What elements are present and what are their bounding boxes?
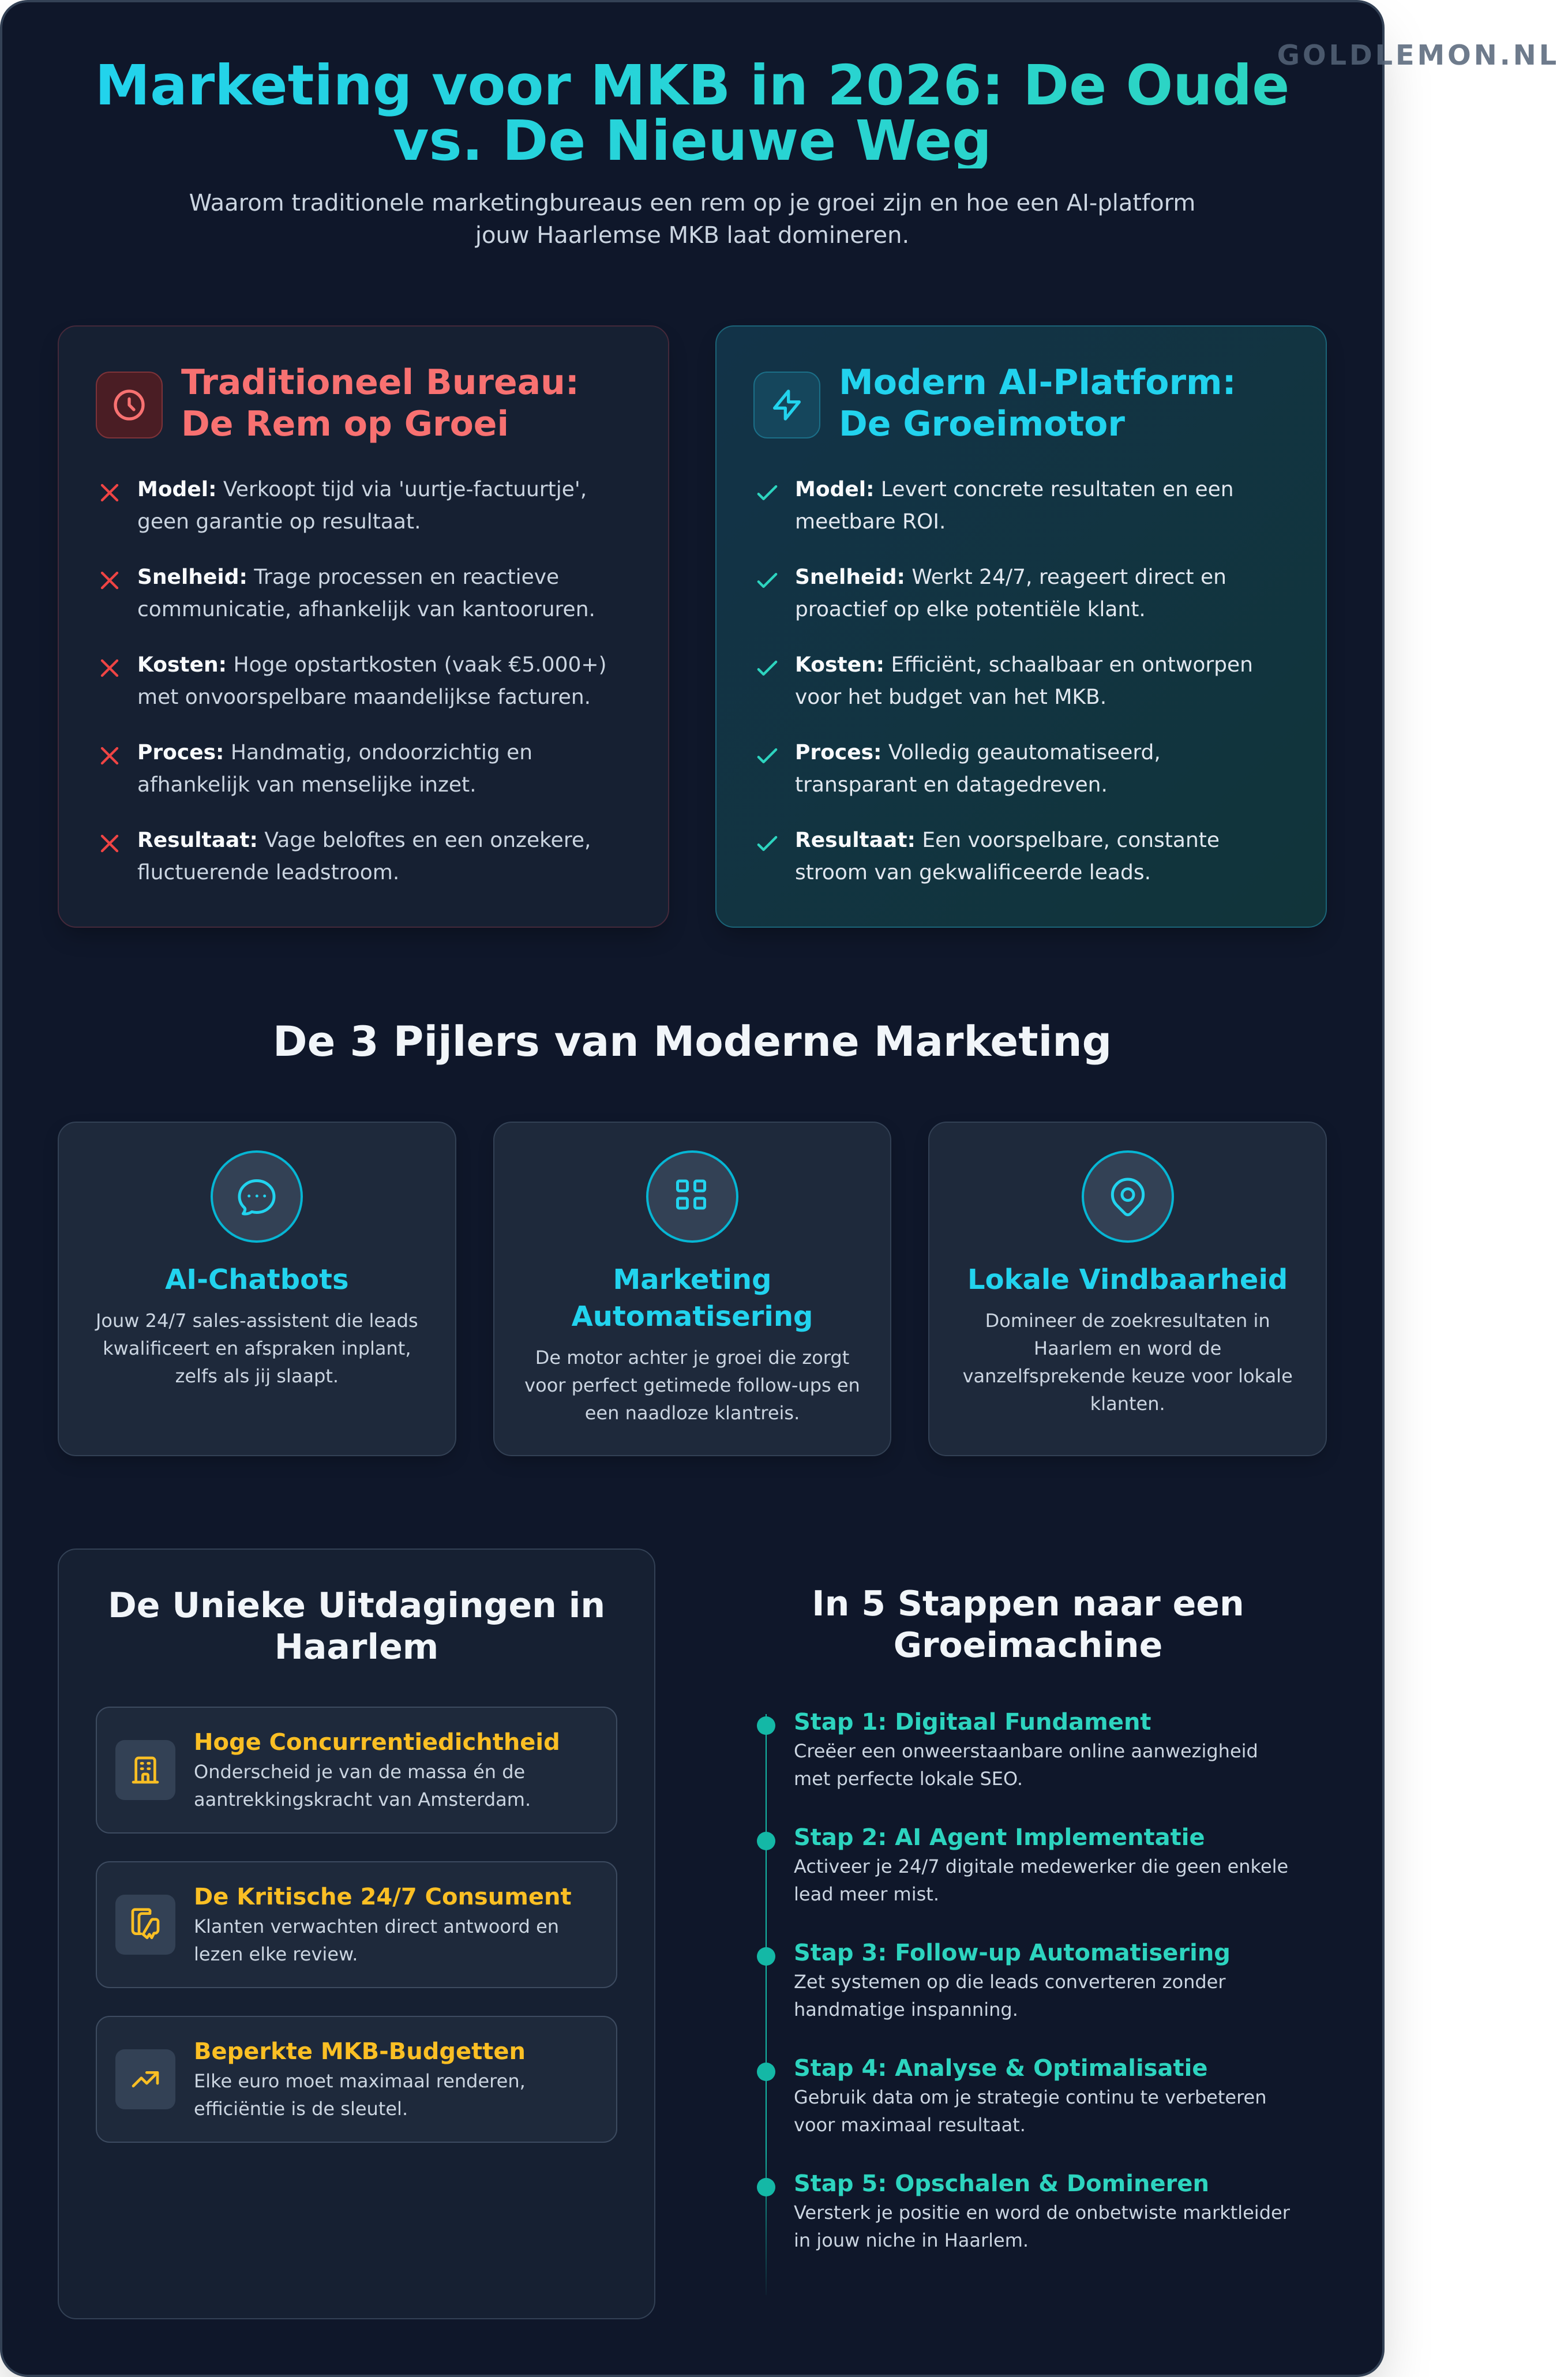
panel: ai-chatbots xyxy=(58,1122,456,1456)
panel: marketing automatisering xyxy=(493,1122,891,1456)
panel: in 5 stappen xyxy=(729,1549,1327,2319)
list item: resultaat: Resultaat: Een voorspelbare, constante xyxy=(795,828,1220,852)
list item: kosten: met onvoorspelbare maandelijkse facturen. xyxy=(137,685,591,708)
heading: in 5 stappen xyxy=(729,1583,1327,1666)
step 1: Creëer een onweerstaanbare online aanwezigheid xyxy=(794,1740,1258,1762)
heading: modern ai-platform: Modern AI-Platform: xyxy=(839,362,1236,403)
text: marketing automatisering xyxy=(524,1347,860,1424)
list item: snelheid: Snelheid: Trage processen en reactieve xyxy=(137,565,559,588)
bottom section xyxy=(58,1549,1290,2319)
step 4: Gebruik data om je strategie continu te verbeteren xyxy=(794,2086,1267,2108)
heading: modern ai-platform xyxy=(839,362,1236,444)
list item: proces xyxy=(757,741,1161,796)
list item: proces xyxy=(100,741,532,796)
list item: snelheid xyxy=(757,565,1226,621)
heading: lokale vindbaarheid: Lokale Vindbaarheid xyxy=(967,1264,1288,1296)
subtitle: Waarom traditionele marketingbureaus een rem op je groei zijn en hoe een AI-platform xyxy=(189,190,1195,216)
list item: proces: afhankelijk van menselijke inzet. xyxy=(137,773,477,796)
comparison section xyxy=(58,325,1327,929)
text: ai-chatbots: Jouw 24/7 sales-assistent die leads xyxy=(96,1310,418,1332)
timeline: steps xyxy=(729,1705,1327,2282)
text: lokale vindbaarheid: klanten. xyxy=(1090,1393,1165,1415)
icon: grid xyxy=(646,1150,738,1243)
list item: resultaat: Resultaat: Vage beloftes en een onzekere, xyxy=(137,828,591,852)
panel: traditioneel bureau xyxy=(58,325,669,928)
text: lokale vindbaarheid: Domineer de zoekresultaten in xyxy=(985,1310,1270,1332)
text: ai-chatbots xyxy=(95,1310,418,1387)
heading: in 5 stappen: Groeimachine xyxy=(894,1625,1162,1666)
step 1: met perfecte lokale SEO. xyxy=(794,1768,1023,1790)
text: marketing automatisering: De motor achter je groei die zorgt xyxy=(535,1347,849,1369)
text: hoge concurrentiedichtheid: Onderscheid je van de massa én de xyxy=(194,1761,525,1783)
step 3: Zet systemen op die leads converteren zonder xyxy=(794,1971,1225,1993)
text: beperkte mkb-budgetten: Elke euro moet maximaal renderen, xyxy=(194,2070,526,2092)
icon: location pin xyxy=(1082,1150,1174,1243)
list item: model xyxy=(757,478,1234,533)
text: lokale vindbaarheid: Haarlem en word de xyxy=(1034,1337,1221,1359)
heading: marketing automatisering: Marketing xyxy=(613,1264,771,1296)
step 3 xyxy=(794,1936,1327,2052)
list item: snelheid xyxy=(100,565,595,621)
panel heading: modern ai-platform xyxy=(753,362,1236,444)
text: lokale vindbaarheid: vanzelfsprekende keuze voor lokale xyxy=(963,1365,1293,1387)
subtitle: jouw Haarlemse MKB laat domineren. xyxy=(475,222,909,249)
step 5: Stap 5: Opschalen & Domineren xyxy=(794,2170,1209,2197)
text: ai-chatbots: kwalificeert en afspraken inplant, xyxy=(103,1337,411,1359)
text: hoge concurrentiedichtheid xyxy=(194,1729,560,1810)
challenge: hoge concurrentiedichtheid xyxy=(96,1707,617,1834)
list item: model: meetbare ROI. xyxy=(795,510,946,533)
text: beperkte mkb-budgetten xyxy=(194,2035,526,2123)
heading: de unieke uitdagingen: De Unieke Uitdagingen in xyxy=(108,1585,605,1626)
list item: resultaat: stroom van gekwalificeerde leads. xyxy=(795,861,1151,884)
step 2: Stap 2: AI Agent Implementatie xyxy=(794,1824,1205,1851)
icon: clock xyxy=(96,372,163,438)
heading: ai-chatbots: AI-Chatbots xyxy=(165,1264,349,1296)
heading: de unieke uitdagingen: Haarlem xyxy=(275,1627,438,1667)
heading: traditioneel bureau: De Rem op Groei xyxy=(181,404,509,444)
step 2: lead meer mist. xyxy=(794,1883,939,1905)
title: Marketing voor MKB in 2026: De Oude xyxy=(95,53,1289,118)
icon: lightning bolt xyxy=(753,372,820,438)
title: vs. De Nieuwe Weg xyxy=(393,108,992,173)
panel: modern ai-platform xyxy=(715,325,1327,928)
title xyxy=(58,58,1327,168)
panel: de unieke uitdagingen xyxy=(58,1549,655,2319)
step 1: Stap 1: Digitaal Fundament xyxy=(794,1709,1151,1735)
icon: office building xyxy=(115,1740,175,1800)
text: de kritische 24/7 consument xyxy=(194,1881,572,1969)
text: marketing automatisering: een naadloze klantreis. xyxy=(585,1402,800,1424)
panel heading: traditioneel bureau xyxy=(96,362,579,444)
list item: resultaat: fluctuerende leadstroom. xyxy=(137,861,399,884)
list item: snelheid: communicatie, afhankelijk van kantooruren. xyxy=(137,598,595,621)
text: lokale vindbaarheid xyxy=(963,1310,1293,1415)
watermark: GOLDLEMON.NL xyxy=(1277,39,1559,72)
heading: modern ai-platform: De Groeimotor xyxy=(839,404,1125,444)
heading: de unieke uitdagingen xyxy=(108,1585,605,1667)
step 2 xyxy=(794,1821,1327,1936)
step 5: Versterk je positie en word de onbetwiste marktleider xyxy=(794,2202,1290,2224)
list item: kosten xyxy=(757,653,1253,708)
icon: chat bubble xyxy=(211,1150,303,1243)
text: beperkte mkb-budgetten: efficiëntie is de sleutel. xyxy=(194,2098,408,2120)
challenge: beperkte mkb-budgetten xyxy=(96,2016,617,2143)
text: de kritische 24/7 consument: De Kritische 24/7 Consument xyxy=(194,1884,572,1910)
list item: resultaat xyxy=(100,828,591,884)
subtitle xyxy=(189,190,1195,249)
heading: de 3 pijlers: De 3 Pijlers van Moderne Marketing xyxy=(273,1017,1112,1066)
pillars row xyxy=(58,1122,1327,1456)
step 2: Activeer je 24/7 digitale medewerker die geen enkele xyxy=(794,1855,1288,1877)
list item: resultaat xyxy=(757,828,1220,884)
step 5: in jouw niche in Haarlem. xyxy=(794,2229,1029,2251)
list item: model: Model: Verkoopt tijd via 'uurtje-factuurtje', xyxy=(137,478,587,501)
text: hoge concurrentiedichtheid: aantrekkingskracht van Amsterdam. xyxy=(194,1789,531,1810)
step 3: Stap 3: Follow-up Automatisering xyxy=(794,1940,1231,1966)
list item: model xyxy=(100,478,587,533)
step 4 xyxy=(794,2052,1327,2167)
step 4: Stap 4: Analyse & Optimalisatie xyxy=(794,2055,1207,2082)
list item: proces: Proces: Handmatig, ondoorzichtig en xyxy=(137,741,532,764)
list item: kosten xyxy=(100,653,607,708)
text: de kritische 24/7 consument: lezen elke review. xyxy=(194,1943,358,1965)
text: beperkte mkb-budgetten: Beperkte MKB-Budgetten xyxy=(194,2038,526,2065)
list item: proces: Proces: Volledig geautomatiseerd, xyxy=(795,741,1161,764)
icon: phone with chat bubble xyxy=(115,1895,175,1955)
heading: traditioneel bureau xyxy=(181,362,579,444)
list item: proces: transparant en datagedreven. xyxy=(795,773,1108,796)
list item: model: geen garantie op resultaat. xyxy=(137,510,421,533)
list item: kosten: Kosten: Hoge opstartkosten (vaak €5.000+) xyxy=(137,653,607,676)
list item: kosten: Kosten: Efficiënt, schaalbaar en ontworpen xyxy=(795,653,1253,676)
text: marketing automatisering: voor perfect getimede follow-ups en xyxy=(524,1374,860,1396)
step 5 xyxy=(794,2167,1327,2282)
challenge: de kritische 24/7 consument xyxy=(96,1861,617,1988)
heading: marketing automatisering: Automatisering xyxy=(572,1300,813,1333)
step 1 xyxy=(794,1705,1327,1821)
list item: snelheid: Snelheid: Werkt 24/7, reageert direct en xyxy=(795,565,1226,588)
heading: traditioneel bureau: Traditioneel Bureau: xyxy=(181,362,579,403)
text: de kritische 24/7 consument: Klanten verwachten direct antwoord en xyxy=(194,1915,559,1937)
panel: lokale vindbaarheid xyxy=(928,1122,1327,1456)
heading: in 5 stappen: In 5 Stappen naar een xyxy=(812,1584,1244,1624)
heading: marketing automatisering xyxy=(571,1264,813,1333)
icon: trending up arrow xyxy=(115,2049,175,2109)
list item: snelheid: proactief op elke potentiële klant. xyxy=(795,598,1146,621)
list item: kosten: voor het budget van het MKB. xyxy=(795,685,1106,708)
text: hoge concurrentiedichtheid: Hoge Concurrentiedichtheid xyxy=(194,1729,560,1756)
text: ai-chatbots: zelfs als jij slaapt. xyxy=(175,1365,339,1387)
step 4: voor maximaal resultaat. xyxy=(794,2114,1026,2136)
step 3: handmatige inspanning. xyxy=(794,1999,1018,2020)
list item: model: Model: Levert concrete resultaten en een xyxy=(795,478,1234,501)
